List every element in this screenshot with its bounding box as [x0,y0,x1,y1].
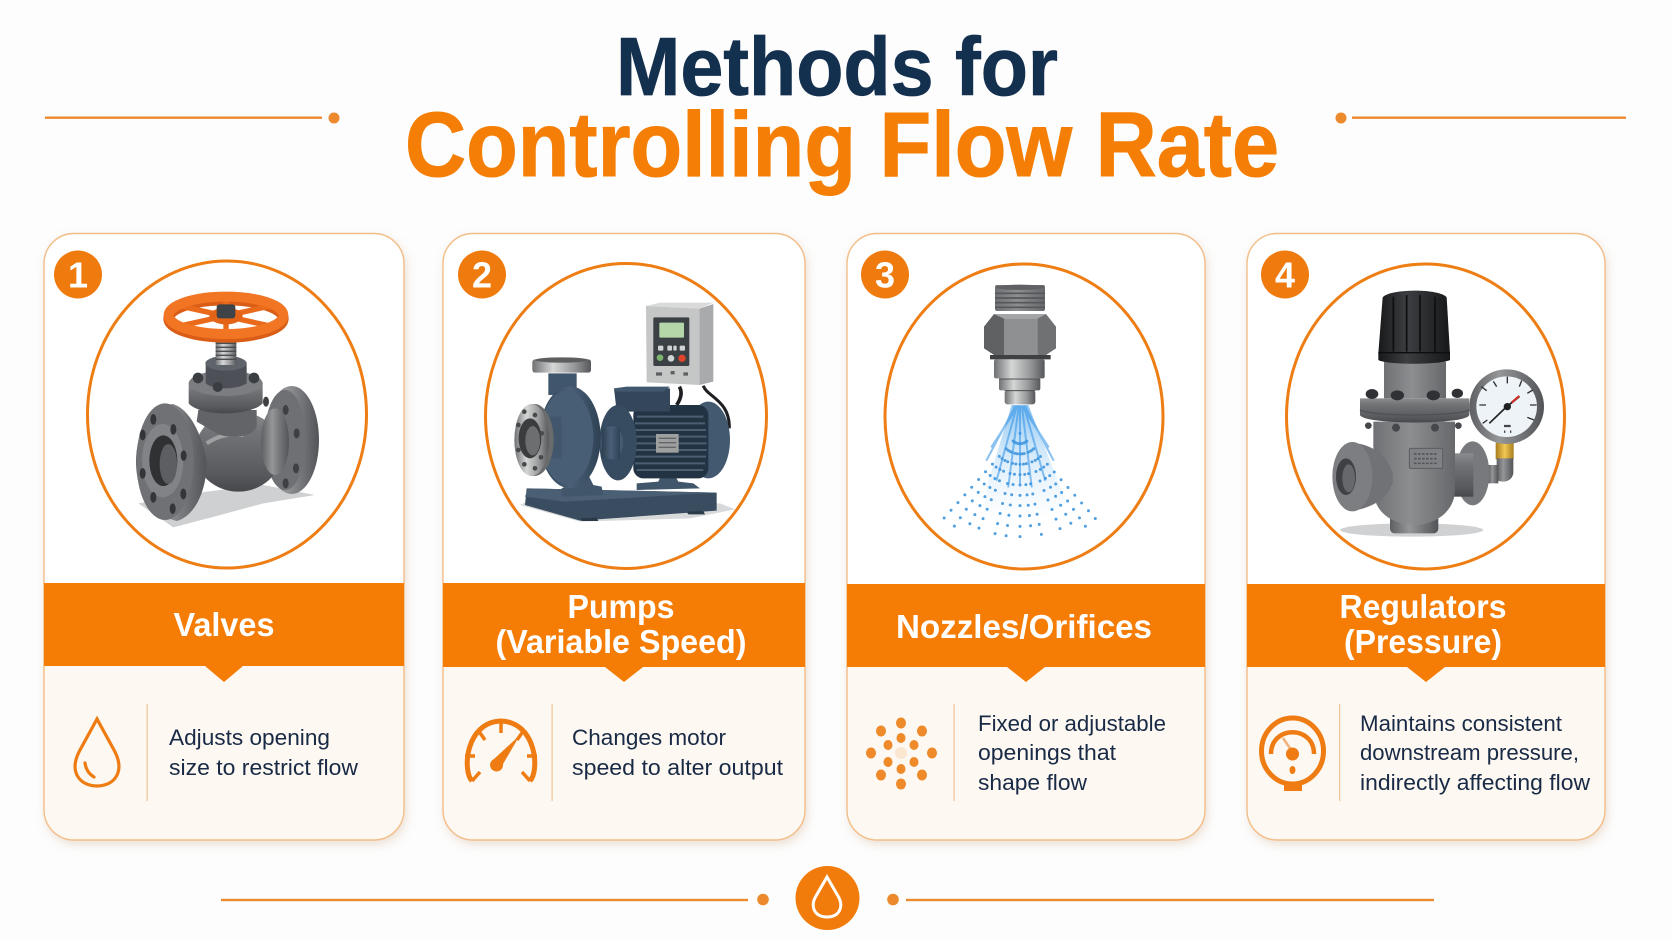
illustration: globe valve [136,297,319,527]
panel: valves [44,234,404,840]
card background [847,234,1205,840]
description: openings that [978,740,1116,765]
title line 2: Controlling Flow Rate [405,94,1279,196]
description: Adjusts opening [169,725,330,750]
number badge 4 [1261,250,1309,298]
title divider left [45,112,340,124]
illustration: pressure regulator with gauge [1332,291,1544,537]
panel: regulators [1247,234,1605,840]
number badge 1: 1 [68,254,88,296]
orange title band [44,583,404,682]
illustration ring [88,261,366,568]
illustration: spray nozzle [942,285,1097,543]
description [169,725,358,780]
panel: nozzles [847,234,1205,840]
orange title band [443,583,805,682]
number badge 2 [458,250,506,298]
number badge 1 [54,250,102,298]
divider [954,704,955,801]
description: Fixed or adjustable [978,711,1166,736]
description [978,711,1166,795]
icon: spray dots [866,718,937,790]
card background [443,234,805,840]
footer divider right [887,894,1434,905]
card background [1247,234,1605,840]
description: Changes motor [572,725,726,750]
number badge 3: 3 [875,254,895,296]
orange title band: (Pressure) [1344,623,1502,660]
description [572,725,783,780]
divider [146,704,148,801]
number badge 3 [861,250,909,298]
number badge 4: 4 [1275,254,1295,296]
orange title band: Nozzles/Orifices [896,608,1152,645]
illustration ring [885,264,1163,569]
panel: pumps [443,234,805,840]
icon: speedometer gauge [465,721,537,781]
description: size to restrict flow [169,755,358,780]
description: speed to alter output [572,755,783,780]
orange title band [1247,584,1605,682]
description: shape flow [978,770,1087,795]
footer icon: water drop in circle [796,866,860,930]
title line 1: Methods for [616,20,1058,113]
orange title band: Valves [174,606,274,643]
illustration ring [1286,264,1564,569]
icon: pressure dial [1262,718,1324,791]
title [405,20,1279,196]
number badge 2: 2 [472,254,492,296]
description: Maintains consistent [1360,711,1562,736]
orange title band: Pumps [568,588,674,625]
description: downstream pressure, [1360,740,1579,765]
orange title band: Regulators [1340,588,1506,625]
description: indirectly affecting flow [1360,770,1590,795]
illustration: centrifugal pump with controller [514,303,735,522]
card background [44,234,404,840]
orange title band: (Variable Speed) [496,623,746,660]
icon: water drop [75,719,119,786]
title divider right [1336,112,1626,124]
illustration ring [486,264,766,568]
description [1360,711,1590,795]
orange title band [847,584,1205,682]
divider [1339,704,1340,801]
footer divider left [221,894,769,905]
divider [552,704,553,801]
